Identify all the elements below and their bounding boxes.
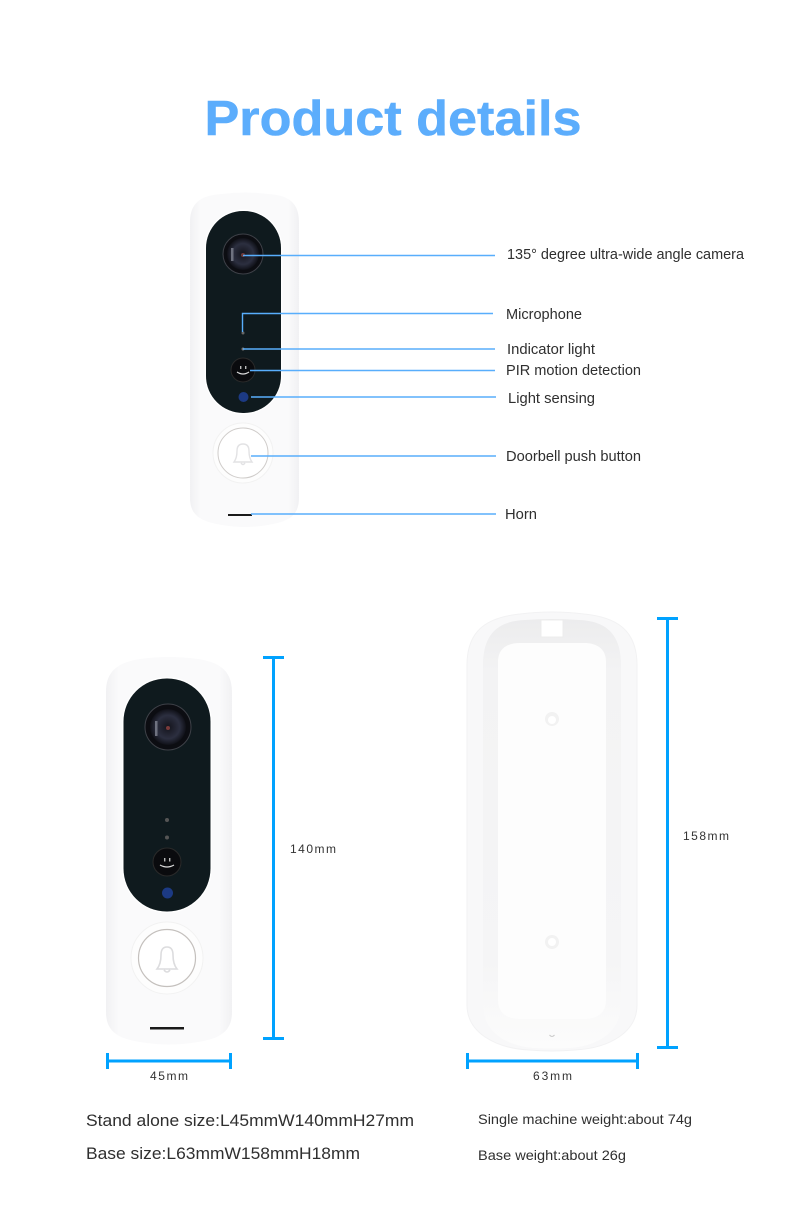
dimension: height 140mm: 140mm <box>290 842 336 856</box>
dimension: width 45mm: 45mm <box>150 1069 188 1083</box>
callout labels <box>505 247 744 523</box>
text block: weight specifications: Single machine weight:about 74g <box>478 1111 692 1127</box>
panel: stand alone size <box>106 657 336 1083</box>
device: front view with dimensions <box>106 657 232 1044</box>
text block: size specifications: Base size:L63mmW158mmH18mm <box>86 1144 360 1163</box>
text block: weight specifications: Base weight:about 26g <box>478 1147 626 1163</box>
title: Product details <box>204 92 582 146</box>
dimension: height 140mm <box>263 658 336 1038</box>
callout labels: Doorbell push button <box>506 449 641 465</box>
callout labels: 135° degree ultra-wide angle camera <box>507 247 744 263</box>
callout labels: Indicator light <box>507 342 595 358</box>
panel: base size <box>467 612 729 1083</box>
callout lines <box>242 256 496 514</box>
callout labels: Horn <box>505 507 537 523</box>
callout labels: Microphone <box>506 307 582 323</box>
dimension: height 158mm: 158mm <box>683 829 729 843</box>
text block: size specifications <box>86 1111 414 1163</box>
dimension: width 45mm <box>108 1053 230 1083</box>
text block: weight specifications <box>478 1111 692 1163</box>
device: front view <box>190 192 299 527</box>
dimension: width 63mm <box>468 1053 638 1083</box>
callout labels: Light sensing <box>508 391 595 407</box>
device: mounting base <box>467 612 637 1051</box>
dimension: width 63mm: 63mm <box>533 1069 572 1083</box>
dimension: height 158mm <box>657 618 729 1048</box>
text block: size specifications: Stand alone size:L45mmW140mmH27mm <box>86 1111 414 1130</box>
panel: annotated doorbell <box>190 192 744 527</box>
callout labels: PIR motion detection <box>506 363 641 379</box>
